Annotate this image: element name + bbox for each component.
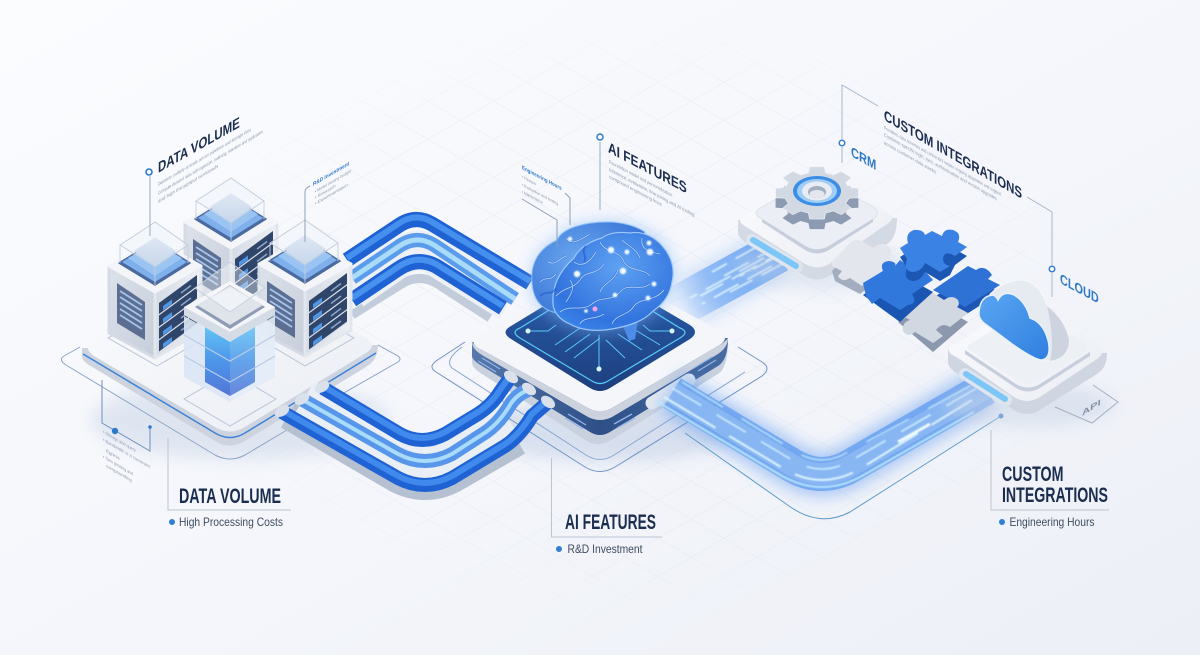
text block: custom integrations description: across customer data stacks xyxy=(884,140,937,176)
text block: data volume description: Compute demand rises with ingestion, indexing, retention and replication xyxy=(158,129,263,197)
callout: r&d investment: • Model training budget xyxy=(315,168,352,194)
callout: engineering hours: • Maintenance xyxy=(522,189,543,205)
label: cloud: CLOUD xyxy=(1060,270,1099,307)
puzzle: top blue xyxy=(900,230,967,281)
puzzle: left grey xyxy=(832,240,895,294)
callout: lower left notes: • Bandwidth is a constraint xyxy=(103,437,151,470)
text block: data volume description xyxy=(158,127,263,205)
callout: api tag: API xyxy=(1082,398,1101,418)
text block: data volume description: and high throughput workloads xyxy=(158,163,219,205)
text block: custom integrations description: Providers, data schemas and connectors require ongoing adaptation and support xyxy=(884,125,1002,198)
icon: gear xyxy=(776,167,858,229)
label: data volume: DATA VOLUME xyxy=(179,485,281,508)
puzzle: lower grey xyxy=(898,293,968,352)
label: custom integrations xyxy=(991,430,1109,529)
server: right xyxy=(259,220,351,356)
text block: ai features description: Foundation model and personalization xyxy=(609,159,673,199)
label: custom integrations: Engineering Hours xyxy=(1010,515,1094,529)
callout: r&d investment: • Experimentation xyxy=(315,182,348,206)
label: ai features xyxy=(552,458,662,556)
isometric grid floor xyxy=(266,48,1036,580)
icon: puzzle pieces xyxy=(832,230,1000,352)
callout: r&d investment: • Research xyxy=(315,183,336,200)
cloud platform xyxy=(945,302,1115,427)
server: left xyxy=(109,222,201,358)
pipes: servers to brain (lower) xyxy=(273,368,557,485)
text block: ai features description: compound engineering lines xyxy=(609,174,662,208)
stream outline xyxy=(685,416,1001,519)
heading: custom integrations: CUSTOM INTEGRATIONS xyxy=(884,107,1022,203)
callout: engineering hours: • Evaluation and testing xyxy=(522,182,559,207)
callout: engineering hours xyxy=(522,165,570,247)
label: ai features: R&D Investment xyxy=(568,542,643,556)
callout: r&d investment xyxy=(305,161,352,242)
leader: data volume xyxy=(146,169,152,236)
leader: crm and custom integrations xyxy=(839,85,878,163)
callout: r&d investment: R&D Investment xyxy=(313,161,349,188)
text block: custom integrations description: Customer-specific logic, sync, authentication and version upgrades xyxy=(884,132,997,203)
callout: api tag xyxy=(1055,385,1118,423)
leader: cloud xyxy=(1027,197,1055,297)
data stream: gear to brain xyxy=(668,244,790,312)
pipes: servers to brain (upper) xyxy=(347,217,530,318)
leader: ai features xyxy=(597,134,603,210)
data volume platform xyxy=(61,262,400,460)
label: custom integrations: INTEGRATIONS xyxy=(1002,484,1108,507)
callout: lower left notes: • Storage and query xyxy=(103,429,136,453)
crm gear platform xyxy=(735,174,905,289)
label: data volume: High Processing Costs xyxy=(179,515,283,529)
callout: lower left notes xyxy=(102,380,152,483)
server: front glass stack xyxy=(184,262,275,402)
icon: cloud xyxy=(979,280,1069,361)
callout: lower left notes: compounding xyxy=(106,463,132,483)
brain platform xyxy=(432,269,767,472)
text block: ai features description: Inference, evaluation, fine tuning and AI tooling xyxy=(609,167,695,219)
heading: ai features: AI FEATURES xyxy=(608,139,687,197)
label: data volume xyxy=(168,438,291,529)
puzzle: middle blue xyxy=(863,260,933,322)
label: ai features: AI FEATURES xyxy=(565,511,656,534)
stream end dot xyxy=(998,414,1004,418)
text block: data volume description: Datasets multiply at scale across pipelines and storage tiers xyxy=(158,127,251,188)
label: custom integrations: CUSTOM xyxy=(1002,463,1064,486)
circuit inset xyxy=(506,275,695,391)
callout: lower left notes: • Tiers growing and xyxy=(103,454,134,477)
puzzle: right blue xyxy=(933,266,1000,315)
callout: lower left notes: Egress xyxy=(106,448,121,461)
label: crm: CRM xyxy=(851,143,876,173)
server: back xyxy=(185,178,277,314)
callout: engineering hours: Engineering Hours xyxy=(522,165,562,192)
callout: engineering hours: • Review xyxy=(522,174,536,186)
icon: glowing brain xyxy=(532,222,673,341)
data stream: brain to cloud xyxy=(652,374,992,487)
heading: data volume: DATA VOLUME xyxy=(158,114,240,177)
